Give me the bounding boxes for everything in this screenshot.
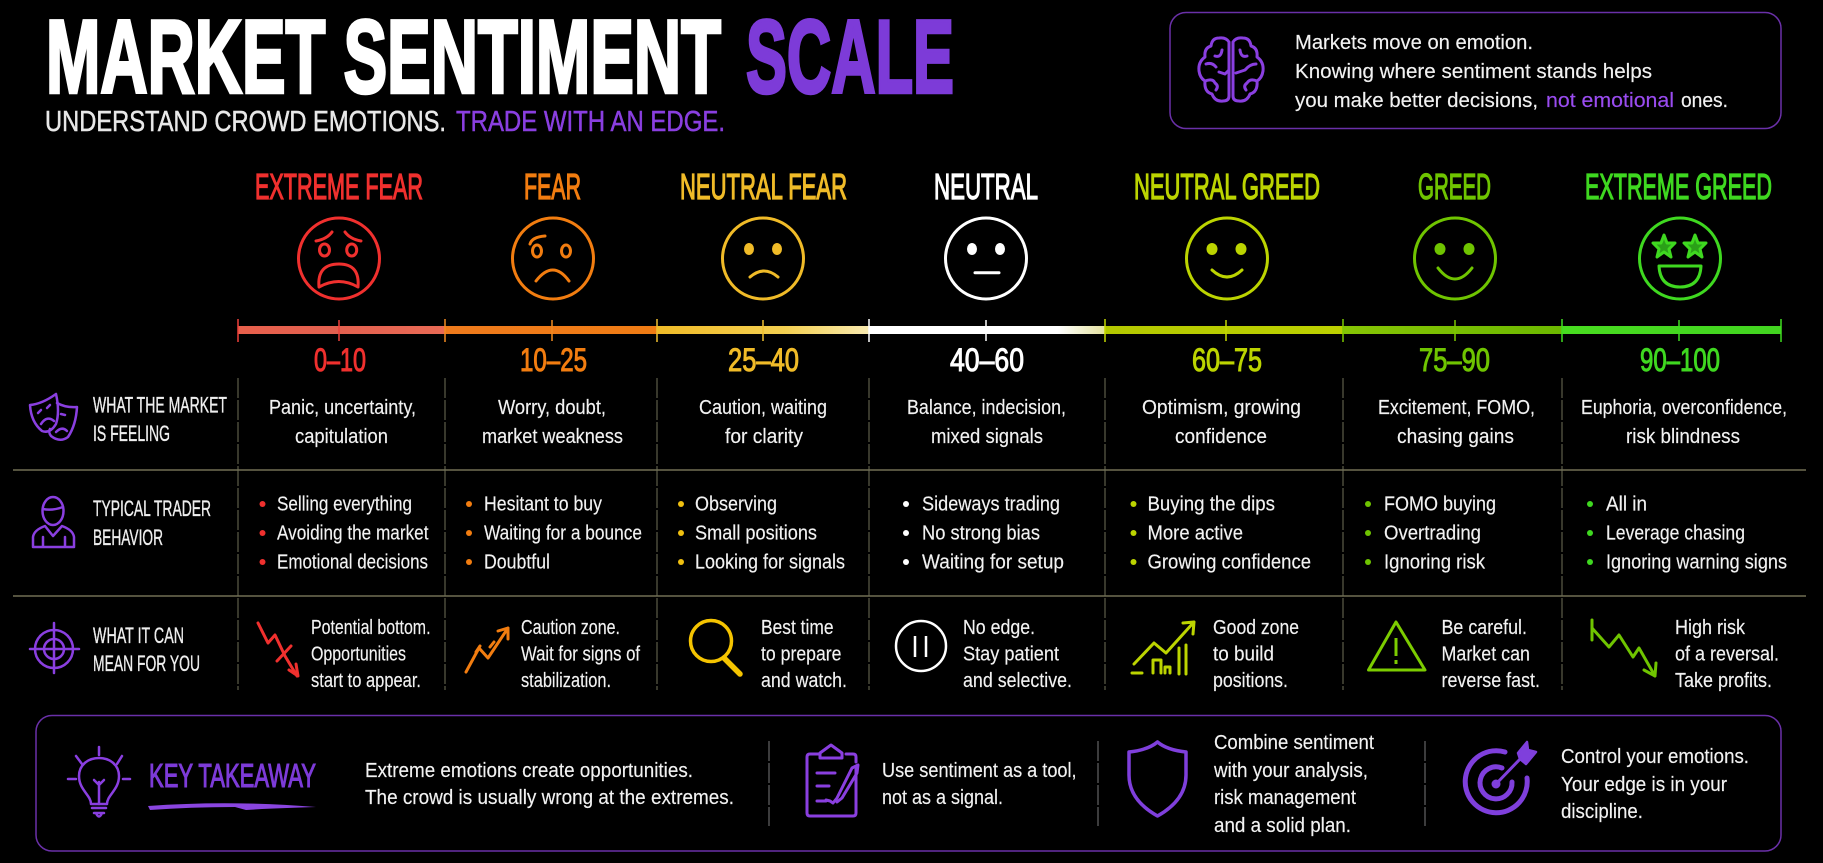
meaning: extreme fear [258, 617, 430, 692]
meaning: fear: Caution zone. [521, 617, 620, 639]
meaning: extreme greed: of a reversal. [1675, 644, 1779, 666]
feeling descriptions: chasing gains [1397, 426, 1514, 448]
subtitle: UNDERSTAND CROWD EMOTIONS. [45, 106, 446, 138]
icon: pause [896, 621, 946, 671]
heading: sentiment categories [255, 166, 1772, 207]
heading: sentiment categories: GREED [1418, 166, 1491, 207]
feeling descriptions [269, 397, 1787, 448]
behavior: neutral greed: Buying the dips [1148, 494, 1275, 516]
behavior: fear: Doubtful [484, 552, 550, 574]
row: typical trader behavior [33, 494, 1787, 574]
panel: intro callout [1170, 12, 1781, 128]
takeaway: tool [882, 760, 1077, 809]
meaning: neutral: and selective. [963, 670, 1072, 692]
feeling descriptions: for clarity [725, 426, 803, 448]
label: meaning: MEAN FOR YOU [93, 651, 200, 676]
range labels: 75–90 [1419, 342, 1490, 378]
behavior: extreme greed: Leverage chasing [1606, 522, 1745, 544]
label: market feeling: WHAT THE MARKET [93, 392, 227, 418]
takeaway: combine: risk management [1214, 787, 1356, 809]
takeaway: discipline: Control your emotions. [1561, 746, 1749, 768]
behavior: neutral fear: Observing [695, 494, 777, 516]
takeaway: discipline [1561, 746, 1749, 823]
icon: falling arrow [258, 623, 298, 676]
icon: extreme fear face [298, 218, 380, 299]
takeaway text [365, 760, 734, 809]
brush underline [148, 803, 316, 810]
takeaway: combine: and a solid plan. [1214, 815, 1351, 837]
behavior: neutral fear: Small positions [695, 522, 817, 544]
icon: neutral fear face [722, 218, 804, 299]
subtitle: TRADE WITH AN EDGE. [456, 106, 725, 138]
label: trader behavior: BEHAVIOR [93, 525, 163, 550]
icon: rising arrow [466, 628, 508, 672]
feeling descriptions: Excitement, FOMO, [1378, 397, 1535, 419]
meaning: greed: Market can [1442, 644, 1530, 666]
behavior: neutral [903, 494, 1064, 574]
behavior: extreme fear: Avoiding the market [277, 522, 429, 544]
icon: bullseye with arrow [1465, 742, 1536, 813]
range labels: 40–60 [950, 342, 1024, 378]
heading: sentiment categories: NEUTRAL FEAR [680, 166, 847, 207]
behavior: greed: Ignoring risk [1384, 552, 1486, 574]
meaning: neutral: No edge. [963, 617, 1035, 639]
range labels: 60–75 [1192, 342, 1262, 378]
behavior: extreme fear [260, 494, 429, 574]
feeling descriptions: market weakness [482, 426, 623, 448]
meaning: neutral fear: and watch. [761, 670, 847, 692]
feeling descriptions: Optimism, growing [1142, 397, 1301, 419]
behavior: fear: Hesitant to buy [484, 494, 602, 516]
icon: crosshair target [30, 623, 79, 673]
behavior: neutral: Sideways trading [922, 494, 1060, 516]
feeling descriptions: Euphoria, overconfidence, [1581, 397, 1787, 419]
behavior: neutral: Waiting for setup [922, 552, 1064, 574]
behavior: greed: FOMO buying [1384, 494, 1496, 516]
title: SCALE [746, 0, 954, 116]
range labels: 10–25 [520, 342, 587, 378]
meaning: fear: Wait for signs of [521, 644, 640, 666]
behavior: neutral greed: Growing confidence [1148, 552, 1311, 574]
behavior: neutral fear [678, 494, 845, 574]
meaning: extreme greed [1592, 617, 1779, 692]
meaning: extreme greed: High risk [1675, 617, 1746, 639]
takeaway text: Extreme emotions create opportunities. [365, 760, 693, 782]
behavior: neutral fear: Looking for signals [695, 552, 845, 574]
meaning: neutral fear [690, 617, 847, 692]
takeaway: combine [1213, 732, 1374, 837]
takeaway text: The crowd is usually wrong at the extremes. [365, 787, 734, 809]
icon: trader [33, 497, 74, 547]
meaning: fear [466, 617, 640, 692]
icon: shield [1129, 742, 1186, 816]
feeling descriptions: risk blindness [1626, 426, 1740, 448]
behavior: fear: Waiting for a bounce [484, 522, 642, 544]
range labels: 90–100 [1640, 342, 1720, 378]
heading: sentiment categories: EXTREME FEAR [255, 166, 423, 207]
heading: key takeaway: KEY TAKEAWAY [149, 757, 316, 794]
icon: falling green arrow [1592, 620, 1656, 676]
intro text: Markets move on emotion. [1295, 32, 1533, 54]
icon: growth chart [1132, 622, 1194, 674]
takeaway: combine: with your analysis, [1213, 760, 1368, 782]
range labels: 25–40 [728, 342, 799, 378]
meaning: fear: stabilization. [521, 670, 611, 692]
behavior: neutral greed [1130, 494, 1311, 574]
feeling descriptions: Panic, uncertainty, [269, 397, 416, 419]
icon: magnifier [690, 620, 740, 674]
meaning: neutral greed: Good zone [1213, 617, 1299, 639]
icon: fear face [512, 218, 594, 299]
heading: sentiment categories: NEUTRAL GREED [1134, 166, 1320, 207]
heading: sentiment categories: FEAR [524, 166, 581, 207]
behavior: extreme fear: Selling everything [277, 494, 412, 516]
row: what it can mean for you [30, 617, 1779, 692]
meaning: neutral: Stay patient [963, 644, 1059, 666]
icon: extreme greed face [1640, 218, 1720, 299]
behavior: neutral greed: More active [1148, 522, 1243, 544]
title: MARKET SENTIMENT [46, 0, 721, 116]
label: meaning [93, 623, 200, 676]
behavior: extreme greed: Ignoring warning signs [1606, 552, 1787, 574]
heading: sentiment categories: NEUTRAL [934, 166, 1038, 207]
meaning: greed: Be careful. [1442, 617, 1527, 639]
meaning: neutral fear: to prepare [761, 644, 842, 666]
meaning: neutral greed: to build [1213, 644, 1274, 666]
range labels [314, 342, 1720, 378]
icon: theatre masks [30, 394, 77, 440]
meaning: extreme fear: Opportunities [311, 644, 406, 666]
icon: neutral greed face [1186, 218, 1268, 299]
label: trader behavior: TYPICAL TRADER [93, 496, 211, 521]
label: trader behavior [93, 496, 211, 550]
behavior: greed [1365, 494, 1496, 574]
label: market feeling: IS FEELING [93, 421, 170, 446]
behavior: extreme greed [1587, 494, 1787, 574]
icon: clipboard [807, 745, 858, 816]
behavior: neutral: No strong bias [922, 522, 1040, 544]
label: market feeling [93, 392, 227, 446]
intro text [1295, 32, 1728, 112]
feeling descriptions: confidence [1175, 426, 1267, 448]
meaning: neutral greed [1132, 617, 1299, 692]
intro text: not emotional [1546, 90, 1674, 112]
icon: brain [1199, 38, 1263, 101]
feeling descriptions: Caution, waiting [699, 397, 827, 419]
icon: warning triangle [1368, 622, 1425, 670]
meaning: extreme fear: start to appear. [311, 670, 421, 692]
feeling descriptions: capitulation [295, 426, 388, 448]
meaning: extreme greed: Take profits. [1675, 670, 1772, 692]
intro text: Knowing where sentiment stands helps [1295, 61, 1652, 83]
icon: greed face [1414, 218, 1496, 299]
behavior: extreme greed: All in [1606, 494, 1647, 516]
intro text: ones. [1681, 90, 1728, 112]
meaning: extreme fear: Potential bottom. [311, 617, 430, 639]
meaning: neutral [896, 617, 1072, 692]
icon: neutral face [946, 218, 1026, 299]
behavior: extreme fear: Emotional decisions [277, 552, 428, 574]
behavior: fear [466, 494, 642, 574]
takeaway: combine: Combine sentiment [1214, 732, 1374, 754]
range labels: 0–10 [314, 342, 366, 378]
icon: light bulb [68, 747, 130, 816]
feeling descriptions: mixed signals [931, 426, 1043, 448]
intro text: you make better decisions, [1295, 90, 1538, 112]
chart: sentiment scale bar [238, 319, 1781, 342]
meaning: neutral fear: Best time [761, 617, 834, 639]
label: meaning: WHAT IT CAN [93, 623, 184, 648]
feeling descriptions: Worry, doubt, [498, 397, 606, 419]
takeaway: discipline: Your edge is in your [1561, 774, 1727, 796]
takeaway: tool: not as a signal. [882, 787, 1003, 809]
takeaway: tool: Use sentiment as a tool, [882, 760, 1077, 782]
row: what the market is feeling [30, 392, 1787, 448]
meaning: neutral greed: positions. [1213, 670, 1288, 692]
behavior: greed: Overtrading [1384, 522, 1481, 544]
meaning: greed [1368, 617, 1540, 692]
meaning: greed: reverse fast. [1442, 670, 1540, 692]
takeaway: discipline: discipline. [1561, 801, 1643, 823]
feeling descriptions: Balance, indecision, [907, 397, 1066, 419]
panel: key takeaway [36, 716, 1781, 851]
